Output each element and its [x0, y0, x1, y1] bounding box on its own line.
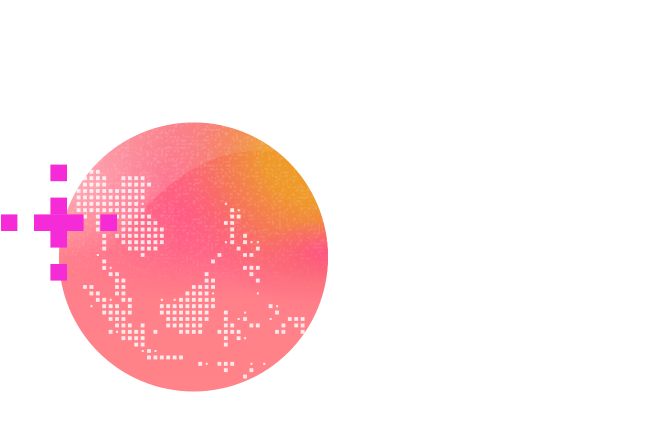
infographic: dotted globe with magenta squares: [1, 122, 328, 392]
magenta pixel cross squares: [1, 165, 117, 281]
square: bottom: [50, 264, 67, 281]
globe: [59, 122, 328, 392]
dot map of Southeast Asia: [77, 172, 305, 377]
square: cross left: [34, 214, 51, 231]
square: cross right: [67, 214, 84, 231]
square: top: [50, 165, 67, 181]
square: cross centre: [50, 214, 67, 231]
square: far left: [1, 214, 17, 231]
square: cross top: [50, 198, 67, 214]
square: right on globe: [100, 214, 117, 231]
square: cross bottom: [50, 231, 67, 248]
